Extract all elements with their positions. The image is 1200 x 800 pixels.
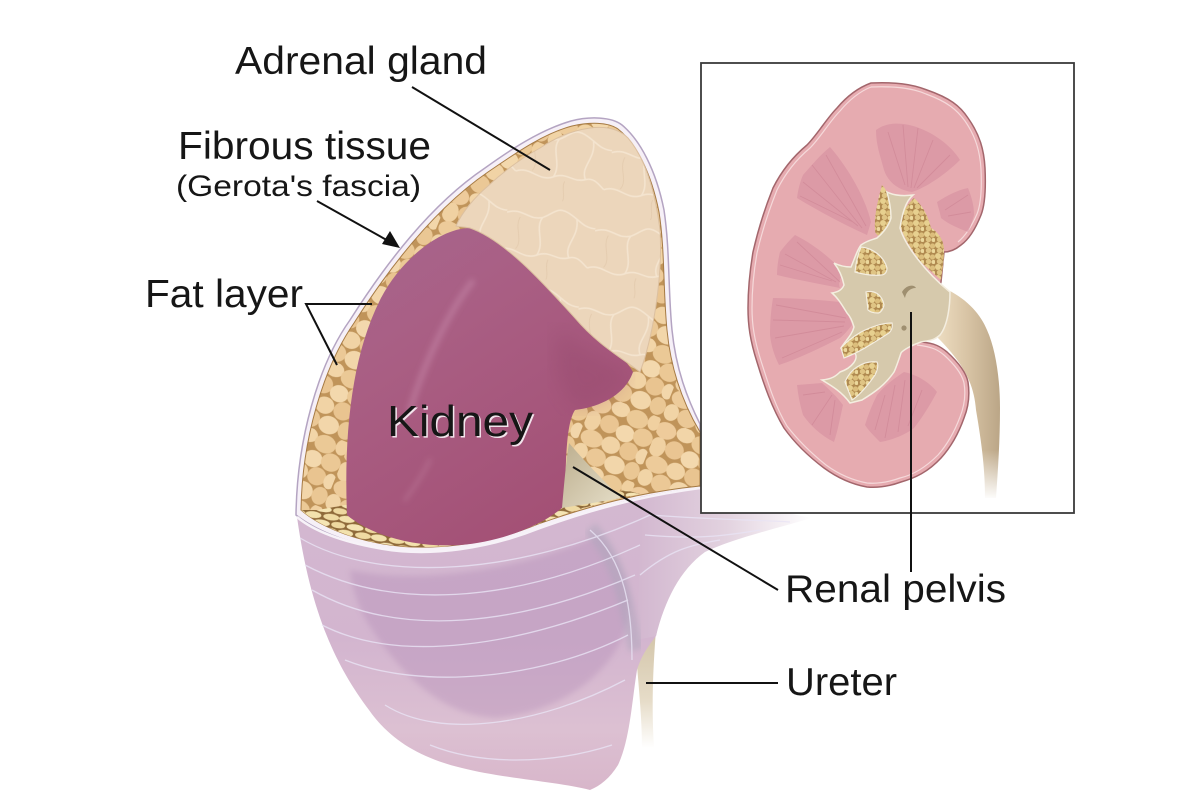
line: renal pelvis to kidney (573, 467, 778, 590)
lower fascia sac (297, 488, 700, 790)
fascia wing to the right (636, 487, 812, 640)
outer fascia capsule (296, 118, 700, 552)
arrowhead: fibrous tissue (382, 231, 400, 248)
inset ureter fade (980, 450, 1004, 500)
label: kidney: Kidney (387, 397, 533, 446)
inset pelvis openings (901, 286, 916, 331)
fat band along the bottom (301, 490, 640, 547)
inset pyramids (770, 124, 974, 442)
inset renal pelvis (822, 192, 950, 403)
lines: fat layer (306, 304, 372, 365)
line: fibrous tissue (317, 201, 392, 243)
kidney showing through fascia (350, 535, 629, 718)
fat layer (301, 123, 700, 547)
inset fat deposits (875, 185, 944, 280)
leader lines (306, 87, 911, 683)
inset kidney section (748, 83, 985, 487)
label: ureter: Ureter (786, 661, 897, 704)
ureter seen through fascia (590, 528, 636, 650)
kidney lobe shadow (555, 330, 628, 408)
line: adrenal gland (412, 87, 550, 170)
label: fat layer: Fat layer (145, 273, 303, 316)
inset pyramid fibres (773, 125, 971, 438)
inset panel (701, 63, 1074, 513)
fascia fibres (300, 515, 790, 760)
inset ureter (938, 290, 1000, 498)
label: adrenal gland: Adrenal gland (235, 40, 487, 83)
illustration: kidney in surrounding tissue (296, 118, 812, 790)
inset kidney inner rim (752, 87, 981, 483)
label: Gerota's fascia: (Gerota's fascia) (176, 170, 421, 203)
line: ureter (646, 682, 778, 684)
inset pelvis pockets (841, 247, 892, 400)
fascia rim highlight (297, 488, 700, 552)
adrenal gland (456, 127, 660, 372)
line: renal pelvis to inset (910, 312, 912, 572)
label: fibrous tissue: Fibrous tissue (178, 125, 431, 168)
inset frame (701, 63, 1074, 513)
ureter lower tube (634, 630, 656, 748)
label: kidney: Kidney (388, 398, 534, 448)
kidney highlights (405, 282, 472, 500)
label: renal pelvis: Renal pelvis (785, 568, 1006, 611)
renal pelvis stub (562, 443, 621, 508)
kidney body (346, 228, 633, 545)
